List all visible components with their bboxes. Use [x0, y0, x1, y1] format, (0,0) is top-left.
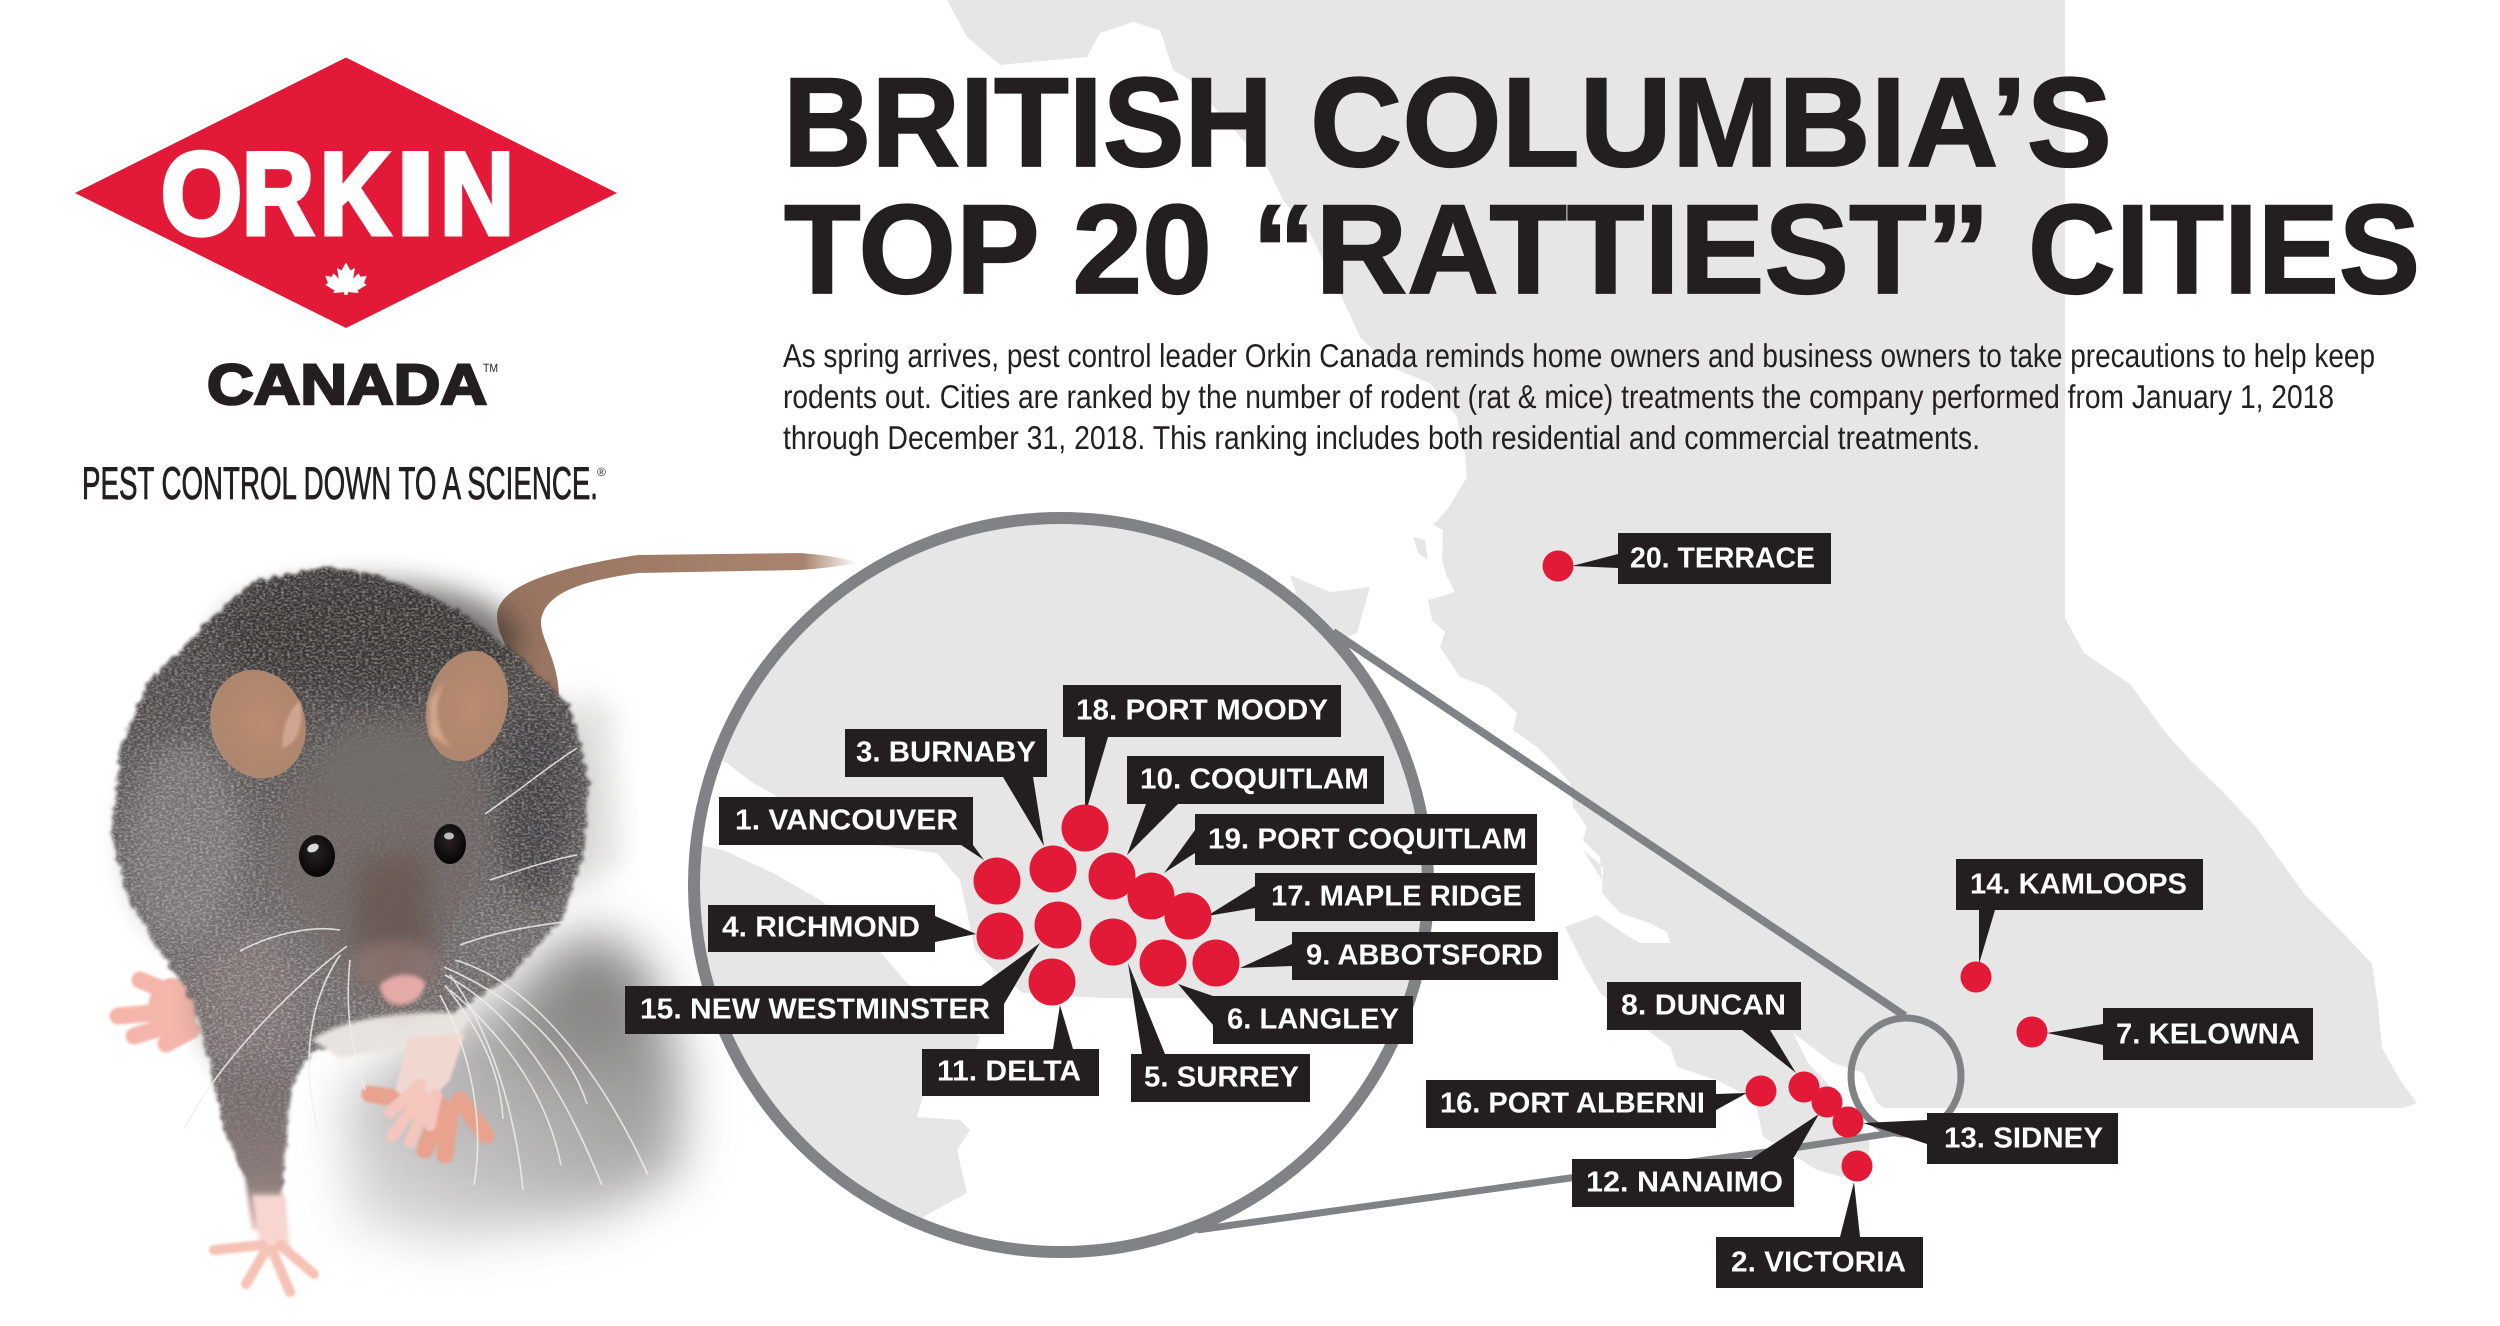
city marker: 5. Surrey	[1090, 918, 1310, 1102]
logo CANADA: CANADA	[207, 353, 487, 417]
city marker: 18. Port Moody: 18. PORT MOODY	[1076, 694, 1328, 726]
city marker: 1. Vancouver: 1. VANCOUVER	[735, 804, 958, 836]
intro paragraph: through December 31, 2018. This ranking includes both residential and commercial treatments.	[783, 419, 1980, 456]
rat front paw	[390, 1033, 465, 1142]
logo wordmark ORKIN: I	[396, 128, 435, 259]
city marker: 13. Sidney: 13. SIDNEY	[1944, 1122, 2103, 1154]
title: TOP 20	[784, 178, 1212, 320]
city marker: 17. Maple Ridge	[1164, 873, 1535, 940]
city marker: 12. Nanaimo	[1572, 1086, 1842, 1207]
city marker: 15. New Westminster: 15. NEW WESTMINSTER	[640, 994, 990, 1026]
tagline: PEST CONTROL DOWN TO A SCIENCE.	[82, 457, 598, 509]
title: COLUMBIA’S	[1310, 51, 2112, 193]
rat body shading	[112, 566, 589, 1200]
city marker: 12. Nanaimo: 12. NANAIMO	[1586, 1166, 1783, 1198]
city marker: 19. Port Coquitlam: 19. PORT COQUITLAM	[1208, 824, 1527, 856]
city marker: 1. Vancouver	[719, 797, 1020, 904]
rat photo illustration	[112, 566, 648, 1292]
city marker: 7. Kelowna: 7. KELOWNA	[2116, 1018, 2300, 1050]
title: “RATTIEST”	[1252, 178, 1990, 320]
title	[783, 51, 2420, 320]
city marker: 19. Port Coquitlam	[1128, 814, 1537, 920]
logo wordmark ORKIN: K	[320, 128, 390, 259]
rat head	[270, 725, 490, 1005]
rat back right foot	[370, 1094, 486, 1155]
rat right ear	[415, 642, 519, 770]
icon: maple leaf	[325, 262, 367, 295]
city marker: 17. Maple Ridge: 17. MAPLE RIDGE	[1271, 880, 1522, 912]
city marker: 9. Abbotsford: 9. ABBOTSFORD	[1306, 940, 1543, 972]
city marker: 6. Langley: 6. LANGLEY	[1227, 1004, 1399, 1036]
city marker: 13. Sidney	[1832, 1106, 2118, 1164]
city marker: 5. Surrey: 5. SURREY	[1144, 1062, 1299, 1094]
rat front foot	[214, 1195, 314, 1292]
city marker: 9. Abbotsford	[1192, 932, 1558, 986]
city marker: 8. Duncan: 8. DUNCAN	[1621, 990, 1786, 1022]
city marker: 10. Coquitlam: 10. COQUITLAM	[1140, 764, 1369, 796]
city marker: 4. Richmond: 4. RICHMOND	[722, 912, 920, 944]
city marker: 14. Kamloops	[1956, 859, 2203, 992]
tagline registered mark: ®	[597, 465, 606, 479]
city marker: 2. Victoria	[1716, 1150, 1923, 1288]
logo trademark: TM	[483, 361, 498, 375]
city marker: 6. Langley	[1140, 940, 1413, 1044]
logo wordmark ORKIN: N	[440, 128, 514, 259]
city marker: 16. Port Alberni: 16. PORT ALBERNI	[1440, 1088, 1705, 1120]
city marker: 10. Coquitlam	[1088, 756, 1384, 900]
magnifier circle: Lower Mainland close-up	[680, 500, 1440, 1300]
magnifier connector lines	[1197, 632, 1961, 1230]
logo red diamond	[75, 58, 617, 328]
logo wordmark ORKIN: O	[161, 128, 242, 259]
city marker: 4. Richmond	[708, 905, 1024, 960]
city marker: 7. Kelowna	[2016, 1008, 2313, 1060]
rat white chest	[312, 1012, 470, 1058]
rat back left foot	[118, 978, 196, 1044]
city marker: 20. Terrace: 20. TERRACE	[1630, 542, 1815, 574]
city marker: 15. New Westminster	[625, 902, 1082, 1034]
rat nose	[380, 975, 425, 1005]
title: CITIES	[2028, 178, 2420, 320]
city marker: 11. Delta	[922, 958, 1099, 1096]
rat shadow	[345, 690, 680, 1240]
intro paragraph	[783, 337, 2375, 456]
city marker: 16. Port Alberni	[1426, 1076, 1776, 1128]
city marker: 2. Victoria: 2. VICTORIA	[1731, 1246, 1906, 1278]
map: British Columbia land silhouette	[947, 0, 2417, 1177]
city marker: 11. Delta: 11. DELTA	[937, 1056, 1081, 1088]
city marker: 8. Duncan	[1607, 982, 1820, 1102]
rat whiskers	[184, 748, 648, 1190]
city marker: 3. Burnaby: 3. BURNABY	[856, 736, 1036, 768]
title: BRITISH	[783, 51, 1273, 193]
city marker: 18. Port Moody	[1062, 685, 1341, 852]
rat left ear	[196, 657, 320, 791]
city marker: 20. Terrace	[1542, 533, 1831, 584]
rat body	[112, 566, 589, 1200]
city marker: 14. Kamloops: 14. KAMLOOPS	[1970, 868, 2187, 900]
logo wordmark ORKIN	[161, 128, 514, 259]
rat left eye	[299, 835, 335, 877]
rat front leg	[222, 1040, 291, 1232]
Orkin logo	[75, 58, 617, 509]
rat right eye	[434, 824, 466, 864]
city marker: 3. Burnaby	[845, 729, 1076, 892]
logo wordmark ORKIN: R	[242, 128, 314, 259]
tail	[497, 553, 858, 703]
